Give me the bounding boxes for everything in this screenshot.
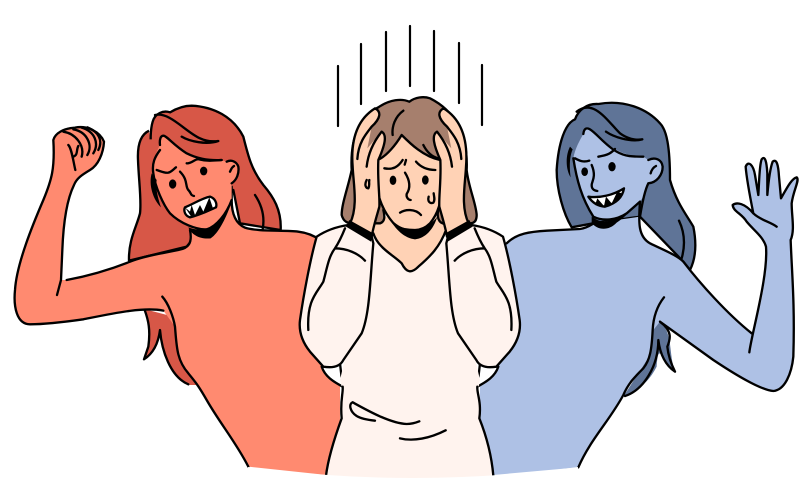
red body and raised fist: [15, 127, 340, 477]
blue body and raised open hand: [480, 158, 798, 477]
rounded bottom crop: [248, 467, 578, 500]
right sleeve: [446, 225, 520, 367]
blue smirking face: [567, 107, 663, 229]
red angry face: [151, 115, 239, 238]
worried face: [377, 135, 442, 239]
red gritted teeth: [184, 197, 216, 217]
red long hair: [129, 106, 281, 385]
figure: angry red woman: [15, 106, 340, 477]
blue sharp grin: [588, 188, 624, 207]
stress lines above head: [338, 26, 482, 126]
neck and chest: [372, 217, 448, 271]
centre shirt and sleeves: [300, 217, 520, 479]
shirt outline and folds: [326, 387, 493, 476]
left hand on head: [346, 108, 385, 242]
blue long hair: [557, 103, 695, 397]
left sleeve: [300, 225, 373, 367]
figure: overwhelmed woman in the centre: [300, 26, 520, 479]
shirt body: [326, 237, 493, 479]
centre head and hands: [342, 97, 477, 242]
figure: sneering blue woman: [480, 103, 798, 477]
brown hair: [342, 97, 477, 224]
right hand on head: [434, 108, 473, 242]
undersleeve gaps: [322, 363, 498, 387]
